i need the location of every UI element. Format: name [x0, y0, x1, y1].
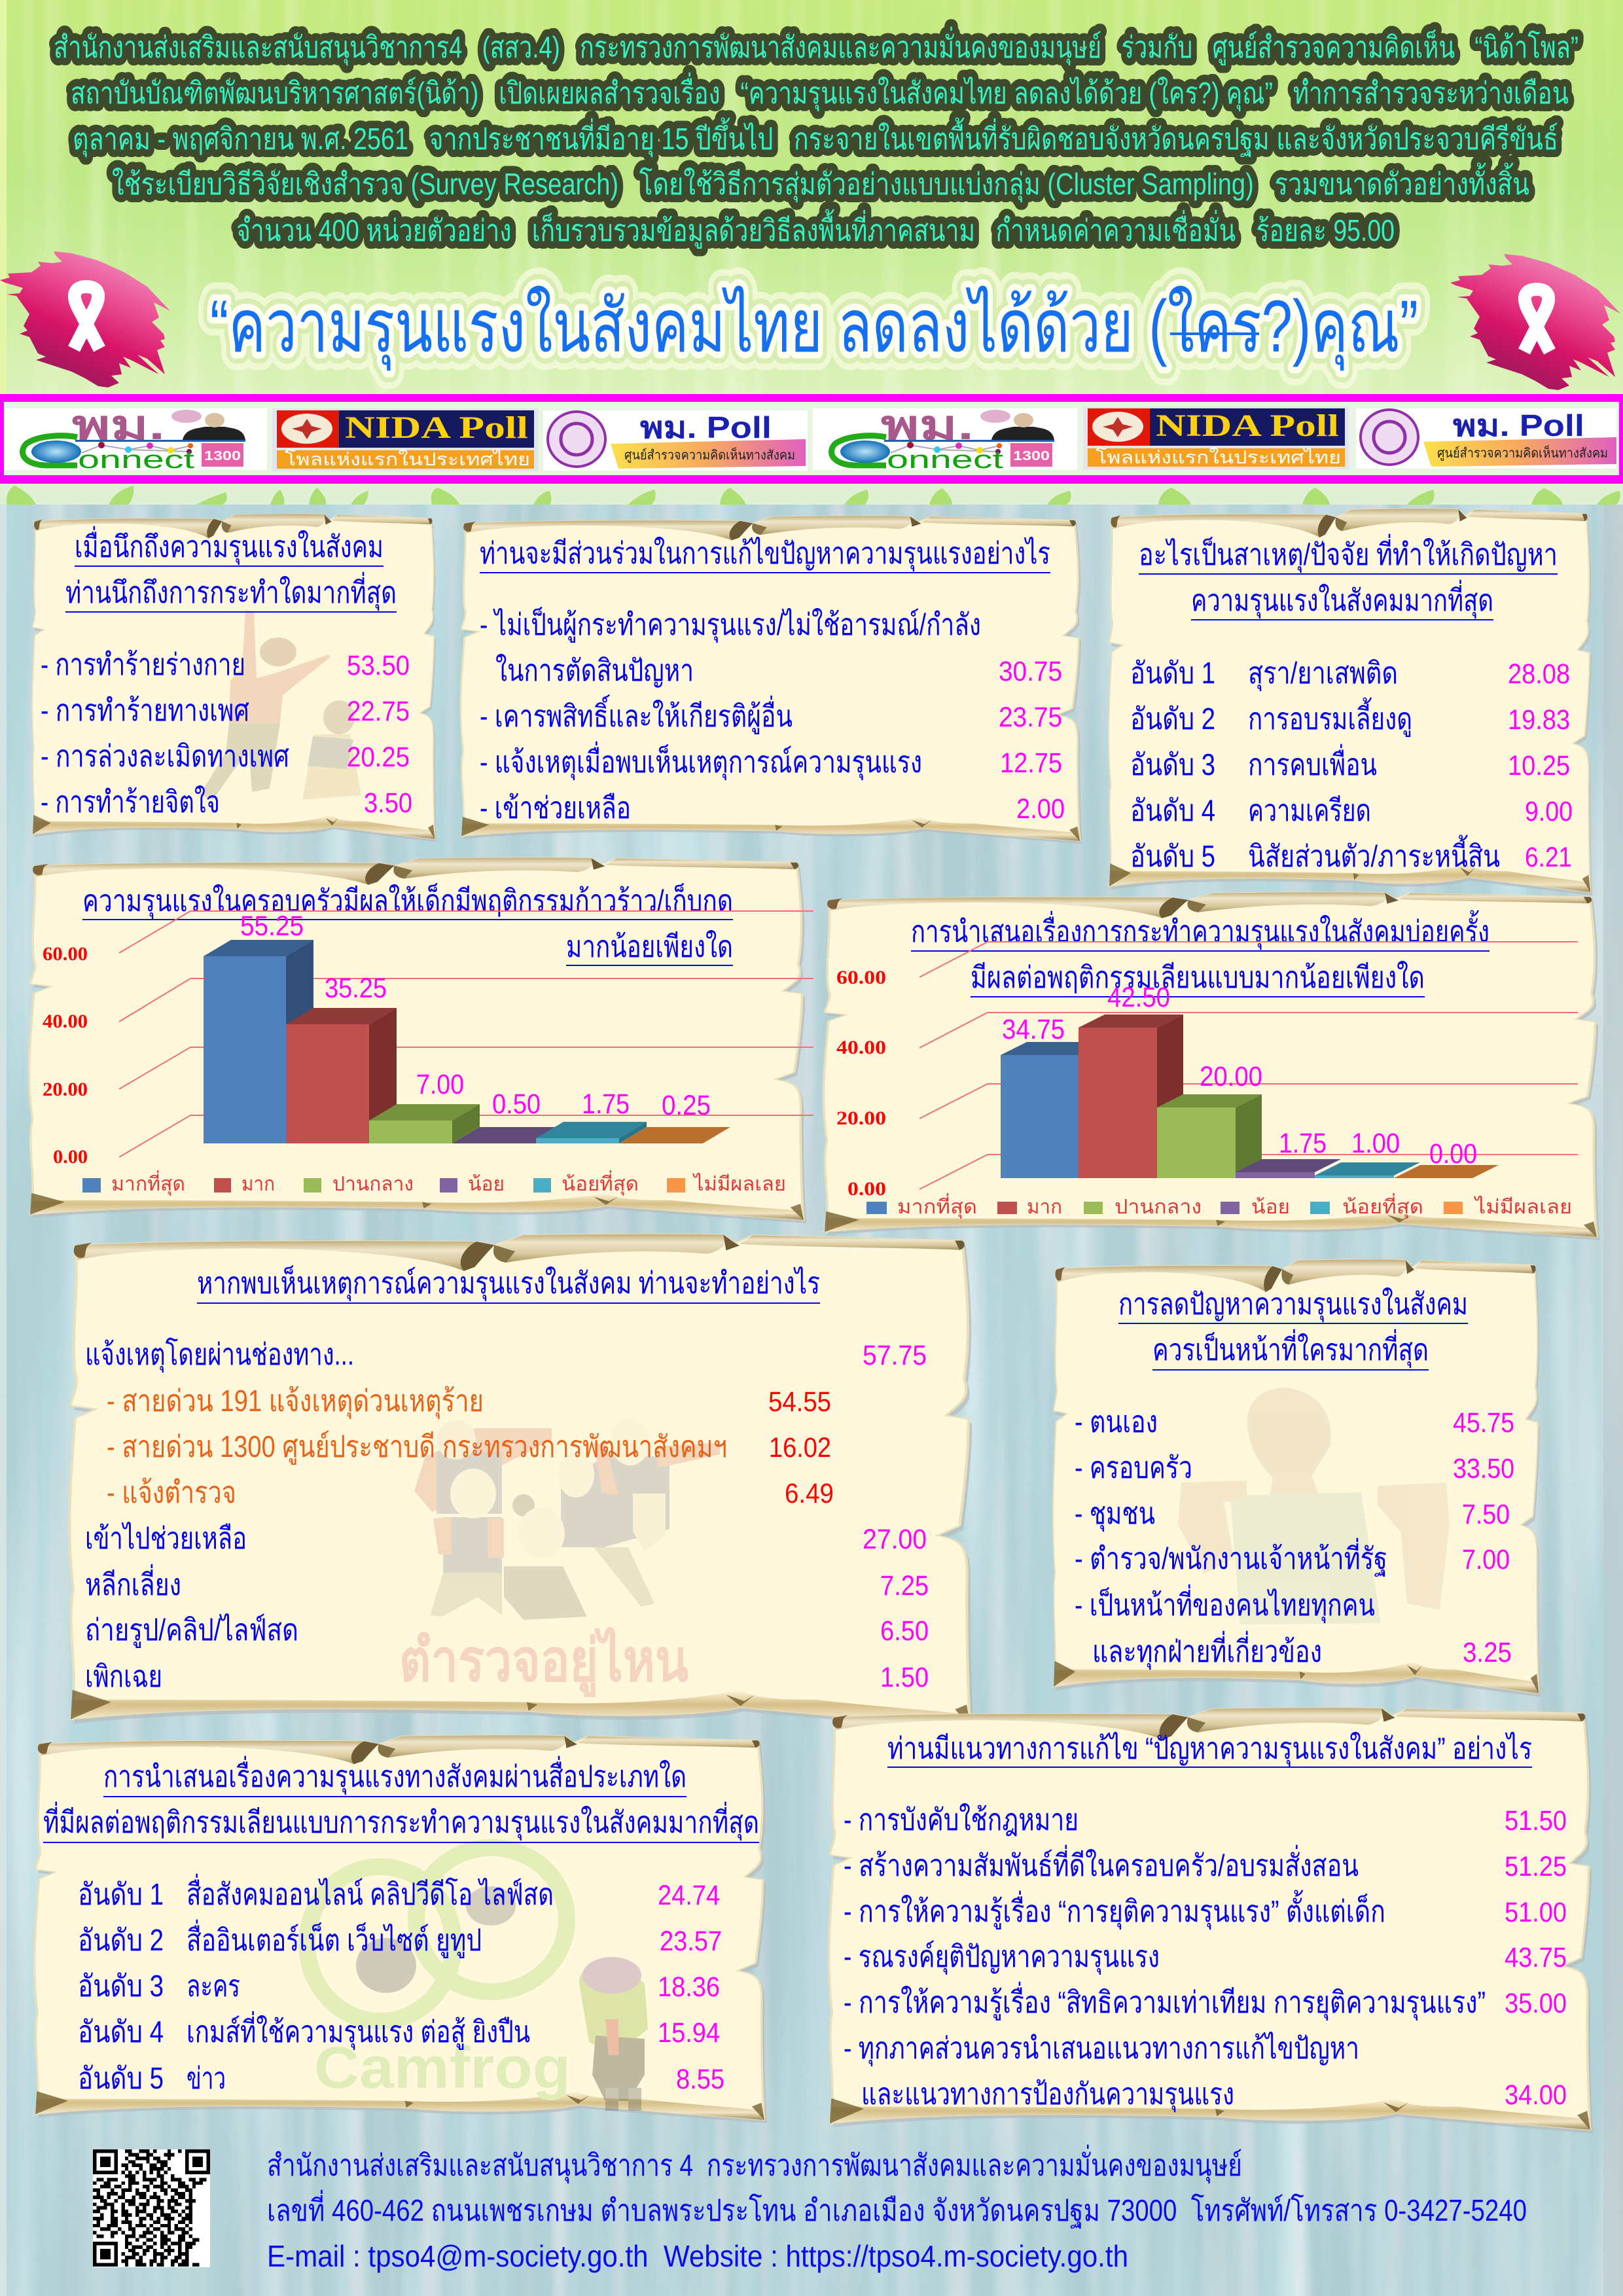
- background: teal wood planks: [0, 505, 1623, 2296]
- list: เข้าไปช่วยเหลือ: [85, 1521, 247, 1555]
- header paragraph: จำนวน 400 หน่วยตัวอย่าง เก็บรวบรวมข้อมูลด้วยวิธีลงพื้นที่ภาคสนาม กำหนดค่าความเชื่อมั่น ร้อยละ 95.00: [236, 209, 1395, 249]
- list: - แจ้งตำรวจ: [107, 1475, 236, 1509]
- list: ละคร: [187, 1969, 240, 2003]
- bar chart: 35.25: [325, 973, 387, 1004]
- list: เกมส์ที่ใช้ความรุนแรง ต่อสู้ ยิงปืน: [187, 2011, 530, 2051]
- list: นิสัยส่วนตัว/ภาระหนี้สิน: [1248, 834, 1500, 873]
- bar chart: 0.00: [53, 1146, 88, 1168]
- list: 27.00: [863, 1524, 927, 1555]
- list: อันดับ 3: [78, 1969, 164, 2003]
- list: 6.50: [880, 1615, 929, 1647]
- title: ความรุนแรงในสังคมมากที่สุด: [1191, 579, 1493, 619]
- list: - ทุกภาคส่วนควรนำเสนอแนวทางการแก้ไขปัญหา: [844, 2031, 1359, 2067]
- background: green header: [0, 0, 1623, 505]
- bar chart: 42.50: [1107, 982, 1170, 1013]
- list: - สายด่วน 191 แจ้งเหตุด่วนเหตุร้าย: [107, 1384, 484, 1420]
- title: มีผลต่อพฤติกรรมเลียนแบบมากน้อยเพียงใด: [971, 960, 1425, 994]
- list: 6.49: [785, 1478, 834, 1509]
- list: 34.00: [1505, 2079, 1567, 2111]
- list: 45.75: [1453, 1407, 1514, 1439]
- title: [911, 910, 1489, 997]
- bar chart: 20.00: [836, 1107, 886, 1129]
- bar chart: 1.75: [582, 1088, 630, 1120]
- list: อันดับ 3: [1130, 747, 1215, 781]
- list: 43.75: [1505, 1942, 1567, 1973]
- list: 28.08: [1508, 658, 1570, 690]
- list: - การล่วงละเมิดทางเพศ: [41, 739, 289, 773]
- logo: MSDHS Connect 1: พม.: [72, 403, 165, 448]
- list: 10.25: [1508, 750, 1570, 781]
- bar chart: 55.25: [240, 910, 304, 942]
- list: แจ้งเหตุโดยผ่านช่องทาง...: [85, 1337, 354, 1373]
- logo: NIDA Poll 2: [1083, 406, 1349, 469]
- list: 51.25: [1505, 1851, 1567, 1882]
- list: - เคารพสิทธิ์และให้เกียรติผู้อื่น: [480, 694, 793, 734]
- panel: solutions: [829, 1708, 1593, 2134]
- list: 7.25: [880, 1570, 929, 1602]
- list: 23.57: [660, 1926, 722, 1957]
- list: - การให้ความรู้เรื่อง “สิทธิความเท่าเทียม การยุติความรุนแรง”: [844, 1981, 1486, 2021]
- list: สุรา/ยาเสพติด: [1248, 656, 1398, 692]
- title: ที่มีผลต่อพฤติกรรมเลียนแบบการกระทำความรุนแรงในสังคมมากที่สุด: [43, 1801, 759, 1841]
- legend: ไม่มีผลเลย: [692, 1172, 786, 1195]
- logo band: [0, 394, 1623, 484]
- list: 54.55: [768, 1386, 831, 1418]
- legend: มากที่สุด: [897, 1193, 977, 1219]
- list: 53.50: [347, 650, 410, 681]
- list: 12.75: [1000, 747, 1062, 779]
- list: 3.50: [364, 787, 412, 819]
- bar chart: 0.50: [492, 1088, 541, 1120]
- logo: NIDA Poll 2: NIDA Poll: [1156, 408, 1339, 443]
- logo: MSDHS Connect 2: [813, 403, 1077, 474]
- panel: whose duty: [1053, 1259, 1541, 1697]
- list: ความเครียด: [1248, 793, 1371, 827]
- list: และทุกฝ่ายที่เกี่ยวข้อง: [1092, 1630, 1322, 1670]
- logo: NIDA Poll 1: NIDA Poll: [345, 410, 528, 445]
- list: - ตนเอง: [1075, 1405, 1158, 1439]
- list: เพิกเฉย: [85, 1659, 162, 1693]
- list: ข่าว: [187, 2061, 226, 2095]
- list: 16.02: [769, 1432, 831, 1463]
- logo: MSDHS Poll 2: ศูนย์สำรวจความคิดเห็นทางสังคม: [1437, 444, 1608, 461]
- list: [1130, 656, 1573, 873]
- legend: น้อยที่สุด: [562, 1170, 639, 1196]
- title: หากพบเห็นเหตุการณ์ความรุนแรงในสังคม ท่านจะทำอย่างไร: [197, 1265, 820, 1302]
- title: [43, 1755, 759, 1843]
- list: 18.36: [658, 1971, 720, 2003]
- list: - การทำร้ายทางเพศ: [41, 693, 249, 727]
- bar chart: 34.75: [1002, 1014, 1065, 1045]
- bar chart: 60.00: [43, 943, 88, 965]
- list: 35.00: [1505, 1988, 1567, 2019]
- logo: NIDA Poll 1: [272, 408, 538, 471]
- list: - ครอบครัว: [1075, 1450, 1192, 1484]
- list: - การทำร้ายจิตใจ: [41, 785, 220, 819]
- list: และแนวทางการป้องกันความรุนแรง: [861, 2077, 1234, 2113]
- list: - ชุมชน: [1075, 1496, 1155, 1532]
- bar chart: 40.00: [836, 1037, 886, 1058]
- list: 6.21: [1525, 842, 1572, 873]
- list: การคบเพื่อน: [1248, 744, 1377, 781]
- list: 20.25: [347, 742, 410, 773]
- title: เมื่อนึกถึงความรุนแรงในสังคม: [75, 526, 383, 565]
- legend: ไม่มีผลเลย: [1474, 1195, 1572, 1218]
- watermark: man pointing at himself: [1178, 1388, 1450, 1624]
- watermark: Camfrog logo: [307, 1848, 648, 2111]
- icon: pink ribbon left: [0, 251, 170, 387]
- list: 3.25: [1463, 1637, 1512, 1668]
- list: 33.50: [1453, 1453, 1514, 1484]
- panel: what would you do: [69, 1234, 974, 1731]
- bar chart: 0.00: [847, 1178, 886, 1200]
- logo: MSDHS Poll 2: พม. Poll: [1453, 408, 1584, 442]
- logo: MSDHS Poll 1: [543, 410, 808, 471]
- title: การลดปัญหาความรุนแรงในสังคม: [1118, 1287, 1468, 1323]
- list: 51.50: [1505, 1805, 1567, 1837]
- bar chart: 20.00: [43, 1079, 88, 1100]
- list: - รณรงค์ยุติปัญหาความรุนแรง: [844, 1939, 1160, 1975]
- logo: NIDA Poll 2: โพลแห่งแรกในประเทศไทย: [1096, 447, 1341, 467]
- watermark: Camfrog wordmark: Camfrog: [314, 2036, 571, 2101]
- watermark: where are the police: ตำรวจอยู่ไหน: [399, 1627, 688, 1697]
- list: - สร้างความสัมพันธ์ที่ดีในครอบครัว/อบรมสั่งสอน: [844, 1844, 1359, 1882]
- list: - เข้าช่วยเหลือ: [480, 791, 631, 825]
- logo: MSDHS Poll 2: [1356, 408, 1616, 469]
- title: มากน้อยเพียงใด: [566, 929, 733, 963]
- logo: NIDA Poll 1: โพลแห่งแรกในประเทศไทย: [285, 449, 530, 469]
- list: อันดับ 1: [78, 1877, 164, 1911]
- legend: มาก: [241, 1174, 275, 1195]
- list: 23.75: [999, 702, 1062, 733]
- list: - การบังคับใช้กฎหมาย: [844, 1803, 1079, 1837]
- bar chart: 1.00: [1351, 1128, 1400, 1159]
- title: ความรุนแรงในครอบครัวมีผลให้เด็กมีพฤติกรรมก้าวร้าว/เก็บกด: [82, 883, 733, 920]
- QR code: [93, 2149, 210, 2267]
- footer contact text: E-mail : tpso4@m-society.go.th Website : https://tpso4.m-society.go.th: [267, 2239, 1128, 2273]
- legend: น้อย: [1251, 1196, 1290, 1218]
- footer contact text: สำนักงานส่งเสริมและสนับสนุนวิชาการ 4 กระทรวงการพัฒนาสังคมและความมั่นคงของมนุษย์: [267, 2144, 1242, 2184]
- list: 7.50: [1462, 1499, 1510, 1530]
- logo: MSDHS Connect 2: พม.: [881, 403, 974, 448]
- leaf strip: [0, 484, 1623, 505]
- header paragraph: [54, 26, 1578, 249]
- title: [82, 883, 733, 966]
- title: ท่านนึกถึงการกระทำใดมากที่สุด: [65, 571, 397, 611]
- list: สื่ออินเตอร์เน็ต เว็บไซต์ ยูทูป: [187, 1919, 482, 1958]
- watermark: cartoon police: [414, 1418, 720, 1620]
- list: 19.83: [1508, 704, 1570, 736]
- title: ควรเป็นหน้าที่ใครมากที่สุด: [1152, 1329, 1429, 1369]
- legend: [866, 1193, 1572, 1219]
- list: - สายด่วน 1300 ศูนย์ประชาบดี กระทรวงการพัฒนาสังคมฯ: [107, 1429, 727, 1465]
- logo: MSDHS Connect 2: onnect: [887, 446, 1004, 474]
- title: การนำเสนอเรื่องการกระทำความรุนแรงในสังคมบ่อยครั้ง: [911, 910, 1489, 950]
- list: อันดับ 4: [1130, 793, 1215, 827]
- list: อันดับ 5: [78, 2061, 164, 2095]
- list: - เป็นหน้าที่ของคนไทยทุกคน: [1075, 1584, 1375, 1624]
- list: อันดับ 2: [1130, 702, 1215, 736]
- bar chart: [836, 942, 1578, 1200]
- list: 15.94: [658, 2017, 720, 2049]
- legend: ปานกลาง: [1115, 1196, 1202, 1218]
- panel: media types: [35, 1735, 767, 2123]
- title: [1139, 533, 1558, 620]
- footer contact text: [267, 2144, 1527, 2273]
- list: 1.50: [880, 1662, 929, 1693]
- list: 57.75: [863, 1340, 927, 1371]
- list: - แจ้งเหตุเมื่อพบเห็นเหตุการณ์ความรุนแรง: [480, 741, 922, 781]
- list: - ไม่เป็นผู้กระทำความรุนแรง/ไม่ใช้อารมณ์/กำลัง: [480, 607, 981, 643]
- list: 7.00: [1462, 1544, 1510, 1575]
- list: 24.74: [658, 1880, 720, 1911]
- watermark: dancers: [200, 609, 361, 800]
- bar chart: 0.25: [662, 1090, 711, 1121]
- panel: what acts come to mind: [32, 514, 437, 842]
- panel: causes: [1109, 509, 1592, 895]
- list: อันดับ 2: [78, 1923, 164, 1957]
- list: [1075, 1405, 1514, 1670]
- logo: MSDHS Connect 1: 1300: [204, 449, 241, 463]
- legend: มากที่สุด: [111, 1170, 185, 1196]
- logo: MSDHS Connect 1: [4, 403, 267, 474]
- legend: [82, 1170, 786, 1196]
- list: ถ่ายรูป/คลิป/ไลฟ์สด: [85, 1613, 298, 1648]
- list: สื่อสังคมออนไลน์ คลิปวีดีโอ ไลฟ์สด: [187, 1873, 554, 1911]
- list: อันดับ 5: [1130, 839, 1215, 873]
- list: หลีกเลี่ยง: [85, 1564, 181, 1602]
- logo: MSDHS Poll 1: พม. Poll: [640, 410, 772, 444]
- list: - การทำร้ายร่างกาย: [41, 647, 245, 681]
- list: 22.75: [347, 696, 410, 727]
- list: [85, 1337, 929, 1693]
- legend: มาก: [1027, 1196, 1062, 1218]
- title: การนำเสนอเรื่องความรุนแรงทางสังคมผ่านสื่อประเภทใด: [103, 1755, 687, 1795]
- legend: น้อยที่สุด: [1342, 1193, 1423, 1219]
- title: [65, 526, 397, 613]
- title: ท่านจะมีส่วนร่วมในการแก้ไขปัญหาความรุนแรงอย่างไร: [480, 536, 1050, 572]
- list: อันดับ 1: [1130, 656, 1215, 690]
- list: - ตำรวจ/พนักงานเจ้าหน้าที่รัฐ: [1075, 1537, 1387, 1577]
- bar chart: 40.00: [43, 1011, 88, 1032]
- list: 51.00: [1505, 1897, 1567, 1928]
- list: 30.75: [999, 656, 1062, 687]
- panel: how will you take part: [461, 516, 1082, 844]
- list: [844, 1803, 1567, 2113]
- list: [41, 647, 412, 819]
- bar chart: 20.00: [1200, 1061, 1262, 1092]
- bar chart: 0.00: [1429, 1138, 1477, 1170]
- list: การอบรมเลี้ยงดู: [1248, 697, 1412, 737]
- legend: ปานกลาง: [332, 1174, 414, 1195]
- bar chart: 60.00: [836, 967, 886, 988]
- title: [1118, 1287, 1468, 1371]
- panel: family violence chart: [29, 857, 813, 1223]
- logo: MSDHS Connect 1: onnect: [78, 446, 195, 474]
- list: 9.00: [1525, 796, 1573, 827]
- list: [78, 1873, 724, 2095]
- bar chart: 7.00: [416, 1069, 464, 1100]
- panel: media frequency chart: [824, 892, 1600, 1240]
- icon: pink ribbon right: [1450, 254, 1620, 390]
- list: 2.00: [1016, 793, 1065, 825]
- logo: MSDHS Poll 1: ศูนย์สำรวจความคิดเห็นทางสังคม: [624, 446, 795, 463]
- list: [480, 607, 1065, 825]
- legend: น้อย: [468, 1174, 505, 1195]
- bar chart: 1.75: [1279, 1128, 1327, 1159]
- list: อันดับ 4: [78, 2015, 164, 2049]
- list: ในการตัดสินปัญหา: [495, 653, 694, 687]
- list: 8.55: [676, 2064, 724, 2095]
- bar chart: [43, 910, 813, 1168]
- logo: MSDHS Connect 2: 1300: [1013, 449, 1050, 463]
- list: - การให้ความรู้เรื่อง “การยุติความรุนแรง” ตั้งแต่เด็ก: [844, 1890, 1385, 1930]
